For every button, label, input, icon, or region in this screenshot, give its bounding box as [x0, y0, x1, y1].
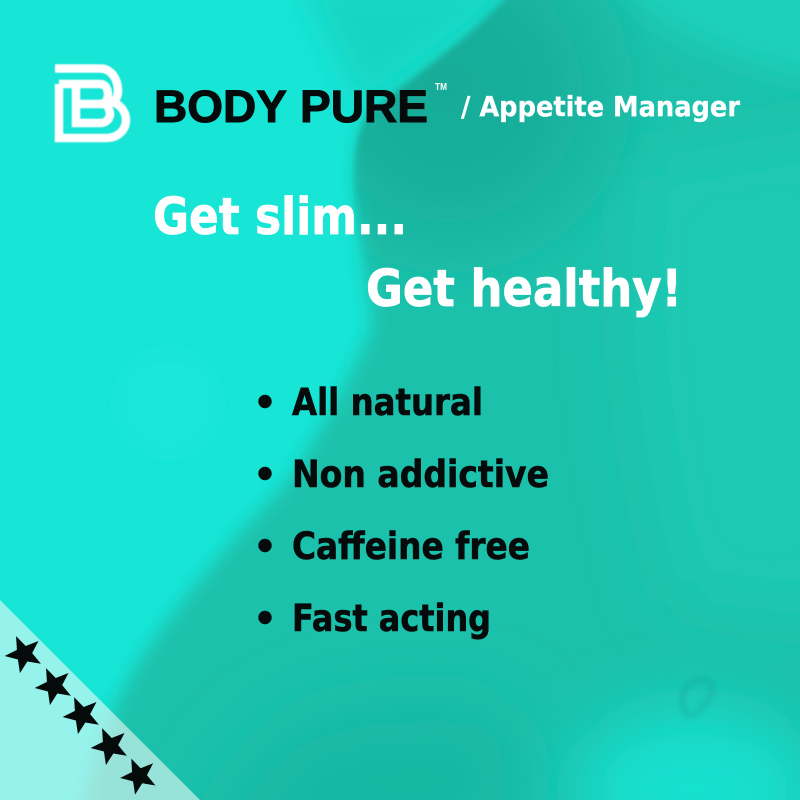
logo icon	[55, 68, 126, 138]
benefit: all natural: All natural	[292, 381, 483, 424]
star 2	[29, 661, 77, 708]
star 5	[115, 751, 162, 797]
navel	[682, 680, 712, 716]
logo wordmark: BODY	[154, 81, 287, 132]
trademark: TM	[435, 82, 447, 93]
logo wordmark: PURE	[300, 81, 428, 132]
benefit: caffeine free: Caffeine free	[292, 525, 530, 568]
headline: get healthy: Get healthy!	[366, 260, 682, 319]
star 1	[0, 629, 47, 676]
headline: get slim: Get slim...	[153, 188, 407, 247]
star 4	[85, 721, 133, 768]
logo wordmark	[154, 81, 428, 132]
corner ribbon	[0, 600, 200, 800]
benefit: non addictive: Non addictive	[292, 453, 549, 496]
star rating	[0, 629, 162, 797]
benefits list	[259, 381, 549, 640]
product label: / Appetite Manager	[461, 90, 740, 123]
star 3	[57, 690, 105, 737]
benefit: fast acting: Fast acting	[292, 597, 491, 640]
